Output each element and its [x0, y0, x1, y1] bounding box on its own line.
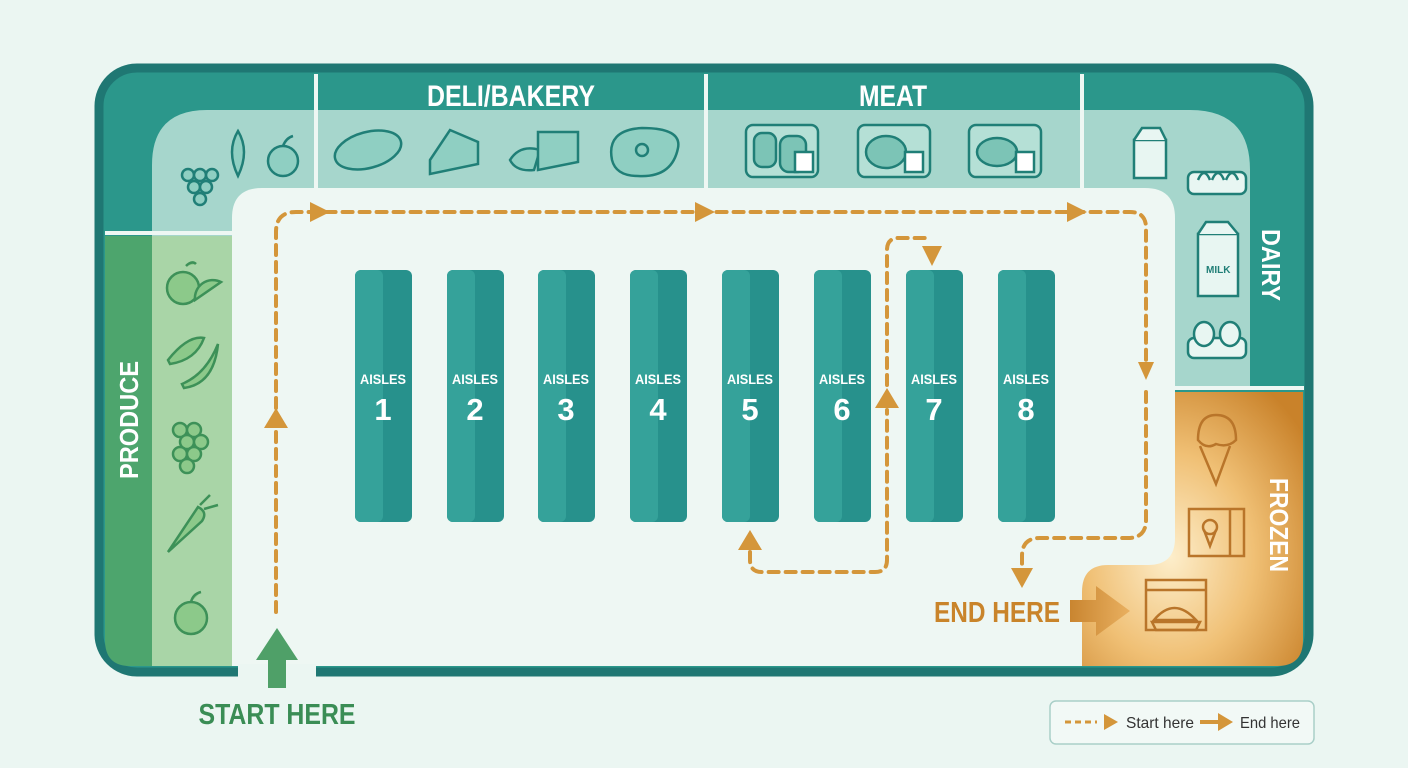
panel: frozen: FROZEN: [1264, 478, 1294, 572]
aisles: 1: [374, 392, 392, 427]
aisles: AISLES: [452, 371, 498, 387]
aisles: AISLES: [360, 371, 406, 387]
panel: dairy: DAIRY: [1256, 229, 1286, 301]
aisles: AISLES: [635, 371, 681, 387]
aisles: 2: [466, 392, 484, 427]
start here label with arrow: [198, 628, 356, 731]
top-left produce icons: [182, 131, 298, 205]
start here label with arrow: START HERE: [198, 699, 356, 731]
aisles: AISLES: [543, 371, 589, 387]
heading: deli/bakery: [330, 80, 678, 176]
legend: Start here: [1126, 715, 1194, 732]
aisles: 3: [557, 392, 575, 427]
heading: meat: MEAT: [859, 80, 927, 113]
panel: frozen: [1082, 392, 1303, 666]
aisles: AISLES: [819, 371, 865, 387]
store frame: [99, 68, 1309, 678]
panel: dairy: [1134, 128, 1286, 358]
legend: End here: [1240, 715, 1300, 732]
end here label with arrow: [934, 586, 1130, 636]
aisles: 4: [649, 392, 667, 427]
aisles: 5: [741, 392, 759, 427]
aisles: 7: [925, 392, 943, 427]
aisles: 6: [833, 392, 851, 427]
entrance gap: [238, 664, 316, 678]
floor: [232, 188, 1175, 666]
aisles: AISLES: [727, 371, 773, 387]
light category band: [152, 110, 1250, 386]
heading: deli/bakery: DELI/BAKERY: [427, 80, 595, 113]
aisles: AISLES: [1003, 371, 1049, 387]
white dividers: [105, 74, 1304, 388]
panel: produce: PRODUCE: [114, 361, 144, 479]
legend: [1050, 701, 1314, 744]
heading: meat: [746, 80, 1041, 177]
panel: dairy: MILK: [1206, 265, 1231, 276]
aisles: [355, 270, 1055, 522]
panel: produce: [105, 236, 232, 666]
end here label with arrow: END HERE: [934, 597, 1060, 629]
aisles: 8: [1017, 392, 1035, 427]
route path: [264, 202, 1154, 612]
aisles: AISLES: [911, 371, 957, 387]
